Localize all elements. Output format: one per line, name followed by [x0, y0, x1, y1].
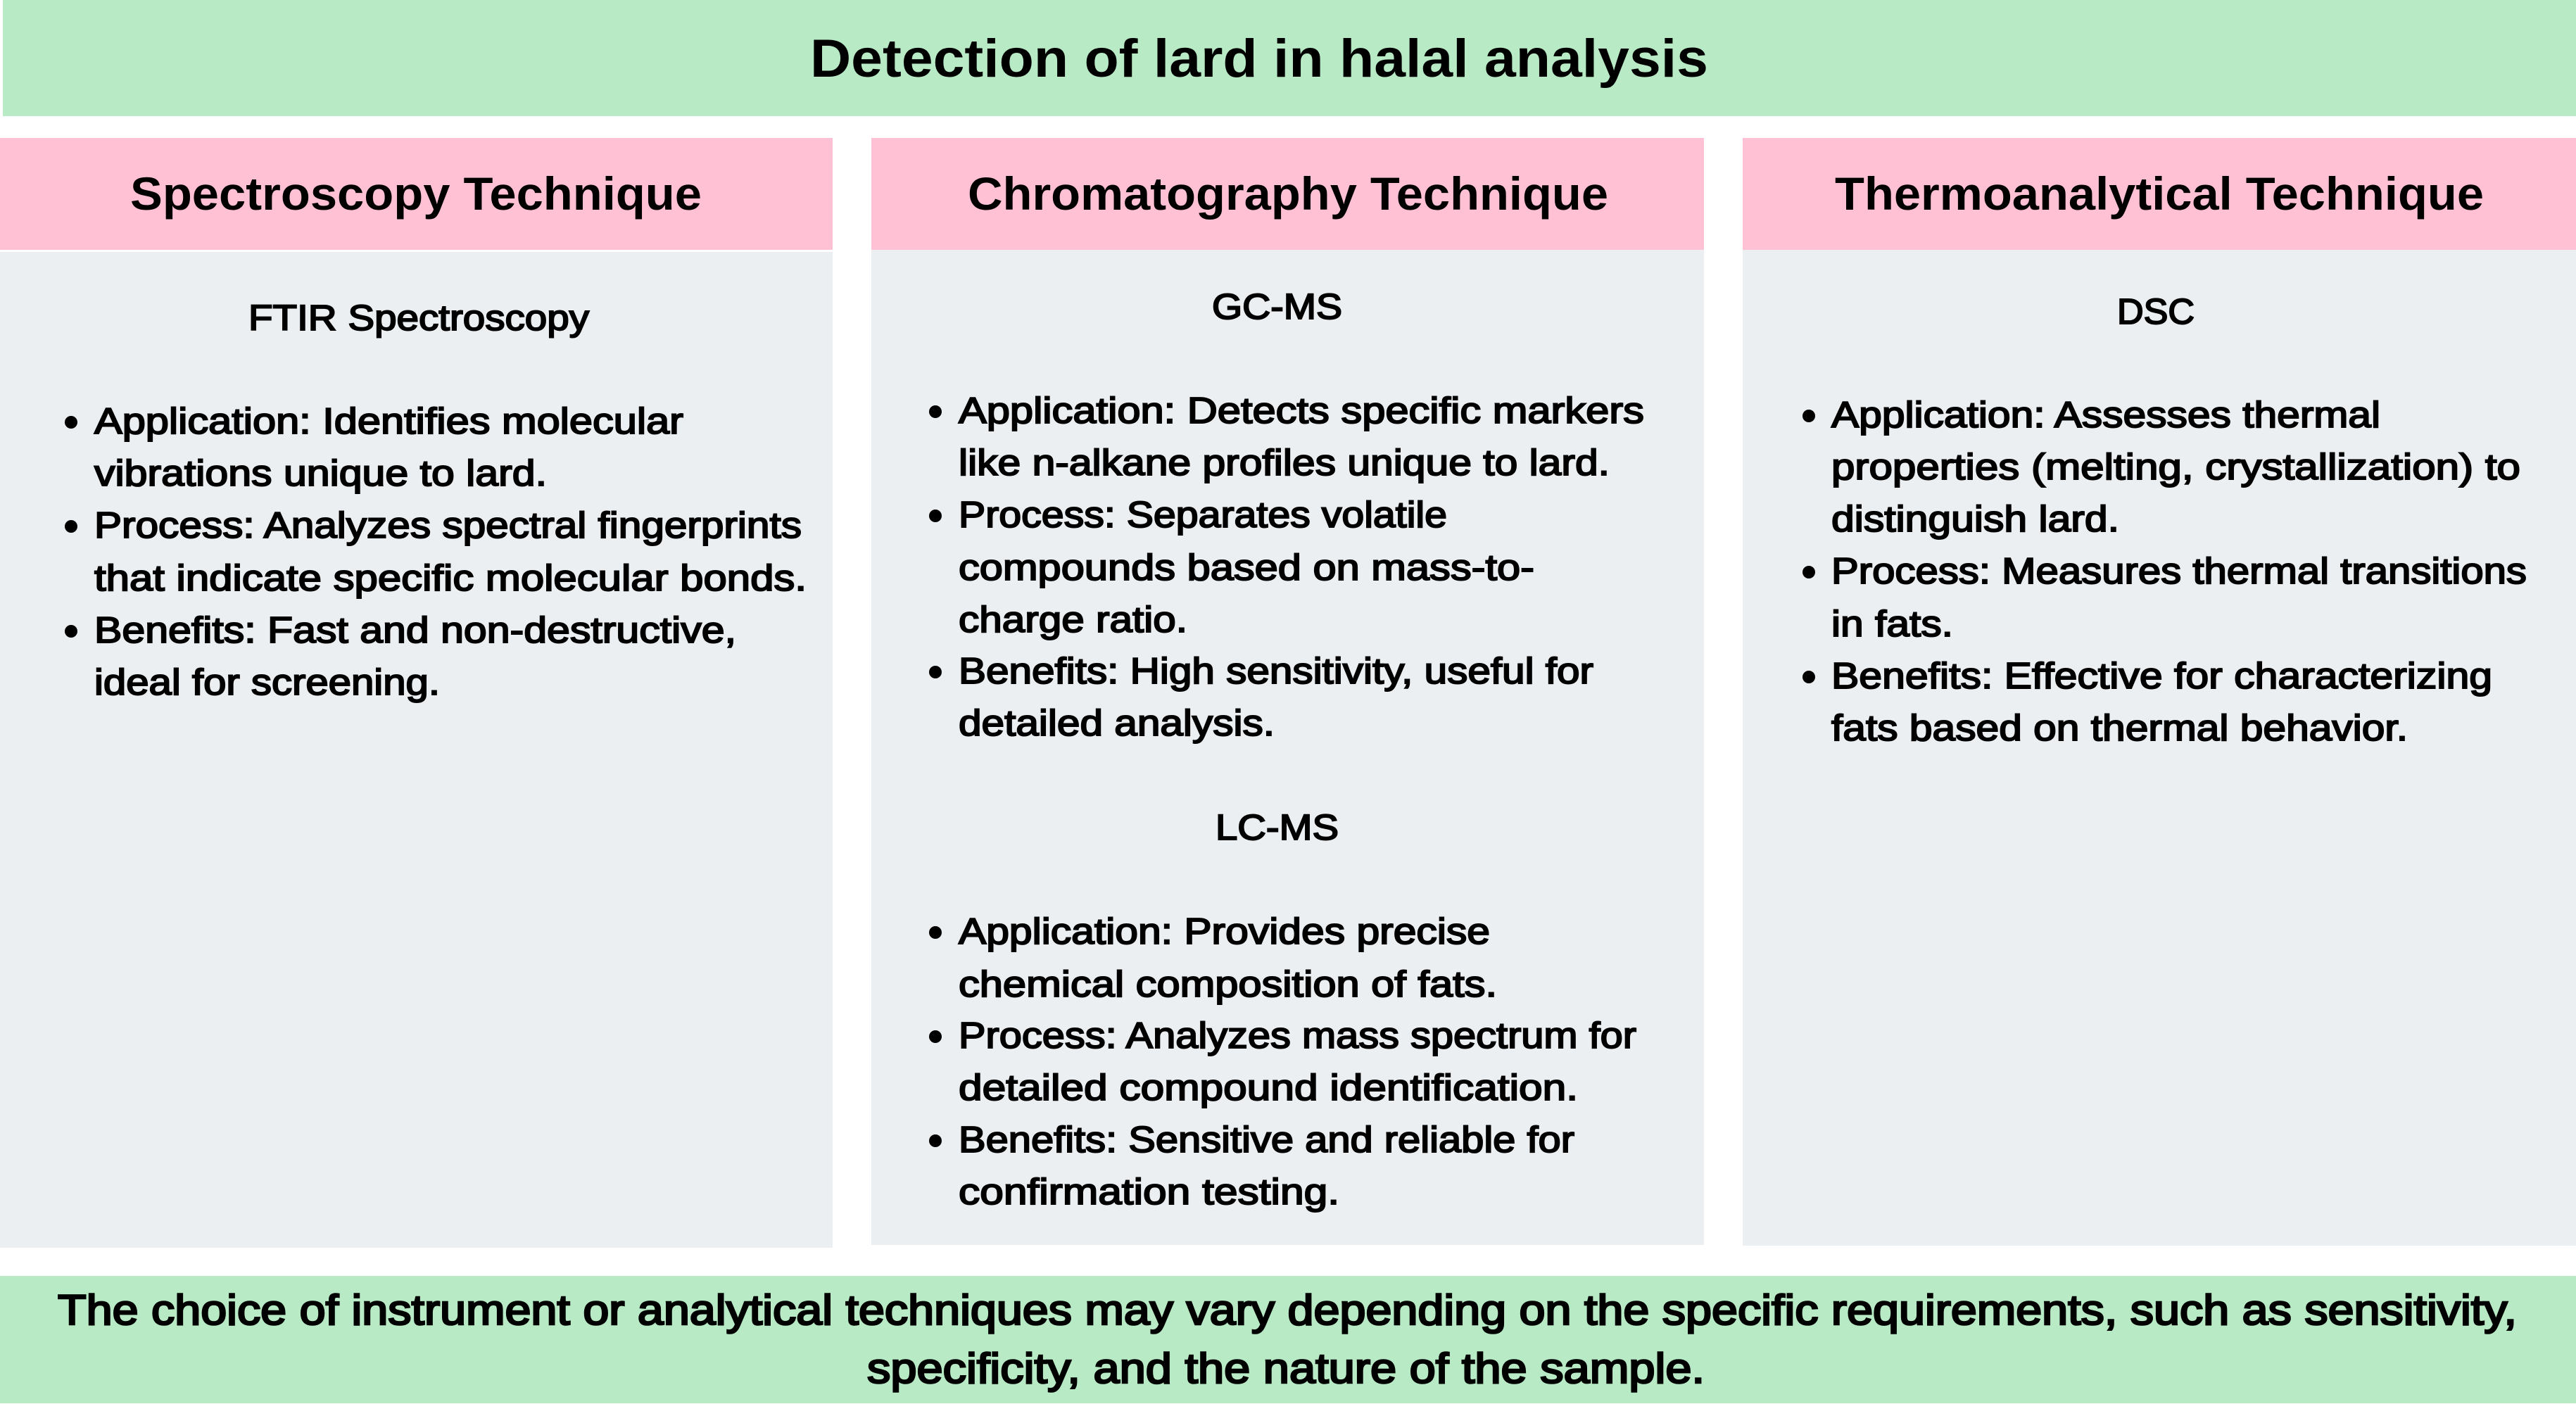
bullet list: DSC: Application: Assesses thermal: [1831, 395, 2380, 436]
subheading: GC-MS: GC-MS: [1212, 286, 1342, 327]
bullet list: FTIR: Process: Analyzes spectral fingerprints: [94, 505, 802, 546]
bullet list: LC-MS: [929, 911, 1636, 1213]
heading: spectroscopy technique: Spectroscopy Technique: [130, 167, 702, 220]
bullet list: GC-MS: detailed analysis.: [959, 703, 1275, 744]
bullet list: FTIR: that indicate specific molecular bonds.: [94, 558, 807, 599]
bullet list: DSC: in fats.: [1831, 604, 1953, 645]
bullet list: GC-MS: Benefits: High sensitivity, useful for: [959, 651, 1593, 692]
heading: thermoanalytical technique: Thermoanalytical Technique: [1835, 167, 2484, 220]
title: Detection of lard in halal analysis: [810, 29, 1708, 89]
bullet list: DSC: Benefits: Effective for characterizing: [1831, 656, 2492, 697]
subheading: FTIR spectroscopy: FTIR Spectroscopy: [248, 298, 590, 338]
bullet list: DSC: Process: Measures thermal transitions: [1831, 551, 2527, 592]
bullet list: LC-MS: Benefits: Sensitive and reliable for: [959, 1120, 1574, 1160]
heading: chromatography technique: Chromatography Technique: [968, 167, 1608, 220]
title banner: [3, 0, 2576, 116]
bullet list: GC-MS: like n-alkane profiles unique to lard.: [959, 443, 1610, 483]
panel: chromatography technique: [871, 138, 1704, 1245]
bullet list: LC-MS: confirmation testing.: [959, 1172, 1339, 1213]
bullet list: GC-MS: compounds based on mass-to-: [959, 548, 1534, 588]
bullet list: LC-MS: Process: Analyzes mass spectrum for: [959, 1016, 1636, 1056]
bullet list: LC-MS: Application: Provides precise: [959, 911, 1490, 952]
bullet list: GC-MS: charge ratio.: [959, 600, 1187, 640]
heading: chromatography technique: [871, 138, 1704, 250]
panel: spectroscopy technique: [0, 138, 833, 1248]
bullet list: FTIR: vibrations unique to lard.: [94, 453, 547, 494]
subheading: DSC: DSC: [2117, 291, 2195, 331]
bullet list: LC-MS: detailed compound identification.: [959, 1068, 1578, 1108]
heading: spectroscopy technique: [0, 138, 833, 250]
subheading: LC-MS: LC-MS: [1216, 807, 1339, 847]
bullet list: DSC: [1802, 395, 2527, 749]
footer note: The choice of instrument or analytical techniques may vary depending on the specific requirements, such as sensitivity,: [58, 1286, 2517, 1334]
bullet list: FTIR: Benefits: Fast and non-destructive,: [94, 610, 736, 651]
bullet list: GC-MS: Application: Detects specific markers: [959, 391, 1644, 431]
bullet list: FTIR: [65, 401, 807, 703]
bullet list: GC-MS: Process: Separates volatile: [959, 495, 1447, 536]
bullet list: DSC: distinguish lard.: [1831, 499, 2119, 540]
heading: thermoanalytical technique: [1743, 138, 2576, 250]
bullet list: LC-MS: chemical composition of fats.: [959, 964, 1497, 1005]
bullet list: FTIR: ideal for screening.: [94, 662, 440, 703]
bullet list: FTIR: Application: Identifies molecular: [94, 401, 683, 442]
footer banner: [0, 1276, 2576, 1403]
panel: thermoanalytical technique: [1743, 138, 2576, 1246]
footer note: [58, 1286, 2517, 1392]
bullet list: DSC: fats based on thermal behavior.: [1831, 708, 2408, 749]
bullet list: GC-MS: [929, 391, 1644, 744]
footer note: specificity, and the nature of the sample.: [867, 1345, 1705, 1392]
bullet list: DSC: properties (melting, crystallization) to: [1831, 447, 2520, 488]
